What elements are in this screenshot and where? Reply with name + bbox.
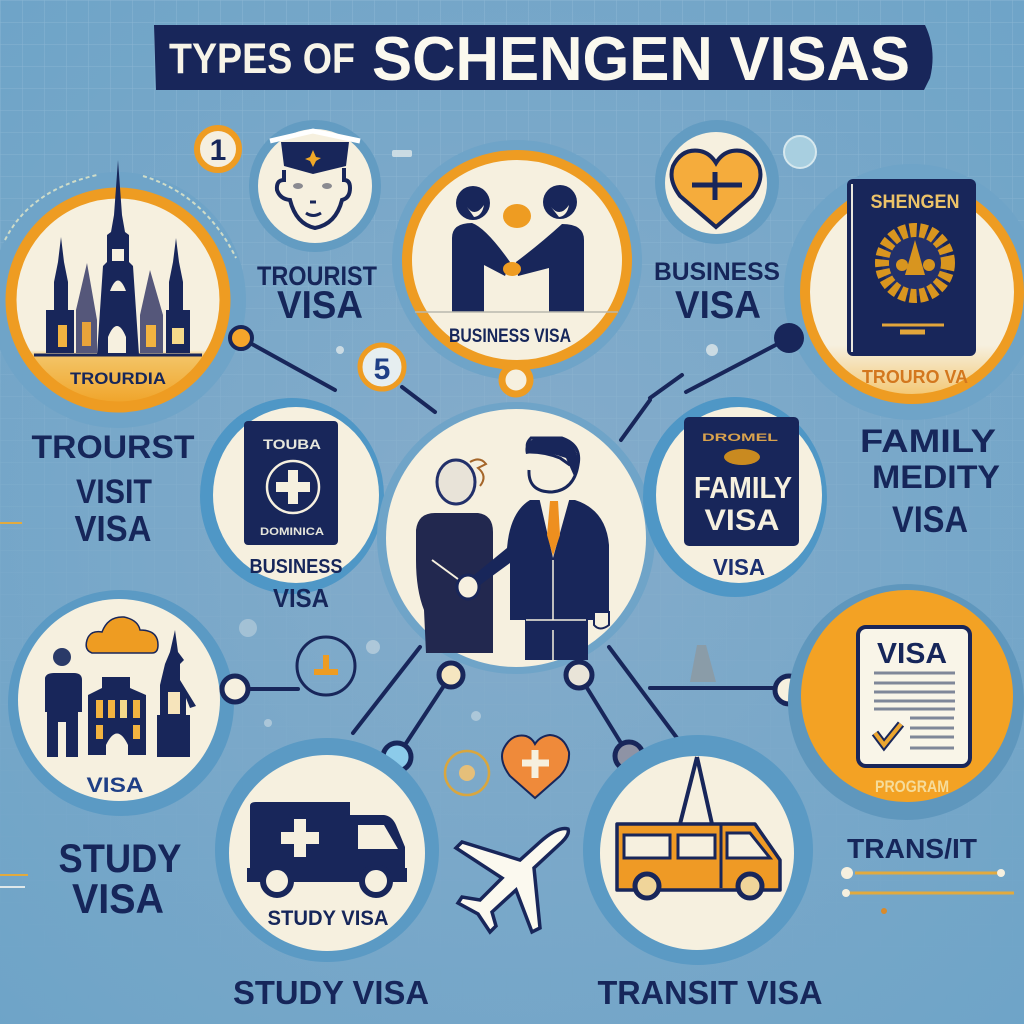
decoration: cone: [690, 645, 716, 682]
small number badge 5: [360, 345, 404, 389]
panel: visa document: [788, 584, 1024, 820]
label: business visa: [654, 258, 780, 327]
label: family medical visa: MEDITY: [872, 459, 1000, 495]
panel: study landmarks: VISA: [86, 774, 144, 797]
label: study visa left: VISA: [72, 875, 164, 922]
panel: medical passport: [200, 398, 384, 613]
panel: tourist landmarks: [0, 160, 246, 428]
connector node left: [230, 327, 252, 349]
label: visit visa: VISA: [74, 508, 152, 549]
label: business visa: VISA: [675, 284, 761, 327]
panel: medical passport: DOMINICA: [260, 526, 324, 538]
label: study visa left: [58, 837, 182, 922]
panel: transit bus: [583, 735, 813, 965]
label: transit visa bottom: TRANSIT VISA: [598, 974, 822, 1011]
label: visit visa: TROURST: [32, 429, 195, 465]
panel: visa document: PROGRAM: [875, 777, 949, 796]
icon: droplet decoration: [784, 136, 816, 168]
panel: medical truck: STUDY VISA: [268, 907, 388, 930]
label: visit visa: VISIT: [76, 473, 152, 511]
panel: family visa document: VISA: [713, 554, 765, 580]
panel: central handshake: [377, 402, 655, 674]
icon: heart with plus: [502, 735, 569, 798]
decoration: scattered specks: [239, 150, 718, 727]
label: tourist visa top: [257, 261, 377, 327]
panel: visa document: VISA: [877, 638, 947, 670]
panel: medical truck: [215, 738, 439, 962]
small number badge 1: [197, 128, 239, 170]
label: transit: [841, 833, 1014, 914]
panel: passport: TROURO VA: [862, 367, 968, 387]
connector node top: [502, 366, 530, 394]
label: family medical visa: [860, 423, 1000, 540]
connector lines: [235, 338, 789, 757]
decoration: orange ring: [445, 751, 489, 795]
label: family medical visa: VISA: [892, 499, 968, 540]
label: transit: TRANS/IT: [847, 833, 977, 864]
panel: heart icon: [655, 120, 779, 244]
title: TYPES OF: [169, 35, 355, 83]
title: SCHENGEN VISAS: [372, 25, 910, 94]
label: tourist visa top: TROURIST: [257, 261, 377, 291]
label: family medical visa: FAMILY: [860, 423, 996, 459]
panel: passport: [784, 164, 1024, 420]
connector node right: [774, 323, 804, 353]
small number badge 1: 1: [210, 134, 226, 167]
panel: family visa document: DROMEL: [702, 432, 778, 444]
label: visit visa: [32, 429, 195, 549]
label: study visa bottom: STUDY VISA: [233, 974, 429, 1011]
connector node lower left: [222, 676, 248, 702]
label: study visa left: STUDY: [58, 837, 182, 881]
panel: medical passport: VISA: [273, 583, 329, 613]
panel: family visa document: FAMILY: [694, 470, 792, 505]
small number badge 5: 5: [374, 353, 390, 386]
decoration: side dashes: [0, 523, 28, 887]
panel: passport: SHENGEN: [870, 192, 960, 213]
connector nodes: [383, 662, 803, 771]
panel: officer portrait: [249, 120, 381, 252]
panel: family visa document: VISA: [704, 504, 780, 537]
panel: medical passport: BUSINESS: [250, 556, 342, 578]
small circle with plus: [297, 637, 355, 695]
panel: family visa document: [643, 397, 827, 597]
label: tourist visa top: VISA: [277, 284, 363, 327]
panel: study landmarks: [8, 590, 234, 816]
icon: airplane: [456, 829, 568, 932]
panel: medical passport: TOUBA: [263, 436, 321, 452]
panel: business handshake: [392, 140, 642, 380]
panel: tourist landmarks: TROURDIA: [70, 369, 166, 388]
label: business visa: BUSINESS: [654, 258, 780, 286]
panel: business handshake: BUSINESS VISA: [449, 326, 571, 347]
